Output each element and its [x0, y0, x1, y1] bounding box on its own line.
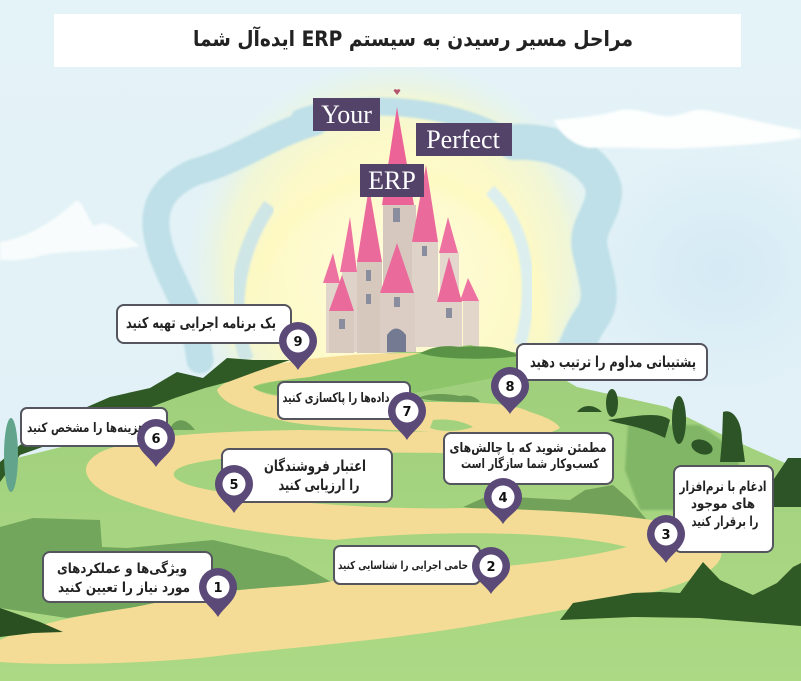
title card: [54, 14, 741, 67]
castle: front towers: [329, 165, 462, 353]
label: Perfect: Perfect: [426, 125, 501, 154]
pin 9: 9: [293, 335, 303, 350]
pin 1: [199, 568, 237, 617]
hill: shaded right slope: [625, 425, 750, 520]
pin 3: [647, 515, 685, 563]
callout 5: اعتبار فروشندگان: [264, 457, 366, 475]
pin 7: [388, 392, 426, 440]
callout 1: ویژگی‌ها و عملکردهای: [57, 560, 187, 577]
pin 5: [215, 465, 253, 513]
callout 3: ادغام با نرم‌افزار: [679, 479, 766, 495]
label: Your: Your: [321, 100, 372, 129]
pin 4: 4: [498, 491, 508, 506]
pin 4: [484, 478, 522, 524]
callout 9: یک برنامه اجرایی تهیه کنید: [126, 314, 276, 332]
bush: small near steps 6 and 7: [170, 394, 480, 430]
callout 7: [278, 382, 410, 419]
label: Your: [313, 98, 380, 131]
callout 4: کسب‌وکار شما سازگار است: [461, 456, 599, 472]
pin 2: 2: [486, 560, 496, 575]
pin 3: 3: [661, 528, 671, 543]
road: winding path: [0, 353, 721, 664]
callout 8: پشتیبانی مداوم را ترتیب دهید: [530, 353, 696, 372]
bush: castle base: [420, 346, 520, 359]
callout 4: مطمئن شوید که با چالش‌های: [450, 441, 606, 456]
pin 7: 7: [402, 405, 412, 420]
pin 1: 1: [213, 581, 223, 596]
callout 8: [517, 344, 707, 380]
label: ERP: ERP: [368, 166, 416, 195]
callout 5: [222, 449, 392, 502]
pin 8: [491, 367, 529, 414]
trees: dark right: [577, 389, 801, 507]
bushes: dark ridge left: [0, 358, 290, 482]
castle: [323, 89, 479, 353]
callout 2: حامی اجرایی را شناسایی کنید: [338, 559, 468, 572]
bushes: centre textured: [463, 485, 647, 520]
castle: heart finial: [394, 89, 400, 95]
callout 6: هزینه‌ها را مشخص کنید: [27, 421, 145, 436]
callout 5: را ارزیابی کنید: [278, 476, 360, 494]
inner grass island: [430, 419, 473, 431]
cloud: top right: [554, 110, 801, 149]
label: Perfect: [416, 123, 512, 156]
pin 2: [472, 547, 510, 594]
pin 6: [137, 419, 175, 467]
hill: upper grass band: [253, 345, 525, 400]
callout 3: های موجود: [691, 496, 755, 512]
pin 8: 8: [505, 380, 515, 395]
swirl: pale blue ribbon: [156, 107, 604, 360]
title text: مراحل مسیر رسیدن به سیستم ERP ایده‌آل شما: [193, 26, 633, 51]
callout 1: [43, 552, 212, 602]
bushes: left textured: [0, 518, 333, 618]
castle: back towers: [323, 107, 479, 353]
callout 4: [444, 433, 613, 484]
callout 9: [117, 305, 291, 343]
hill ground: [0, 352, 801, 681]
pin 9: [279, 322, 317, 370]
bush: dark lower left: [0, 608, 63, 637]
callout 3: [674, 466, 773, 552]
bush: dark lower right: [560, 562, 801, 626]
callout 3: را برقرار کنید: [692, 514, 758, 530]
pin 6: 6: [151, 432, 161, 447]
callout 1: مورد نیاز را تعیین کنید: [58, 580, 190, 596]
tree: cypress left: [4, 418, 18, 492]
cloud: left: [0, 200, 140, 260]
callout 2: [334, 546, 480, 584]
label: ERP: [360, 164, 424, 197]
callout 6: [21, 408, 167, 446]
callout 7: داده‌ها را پاکسازی کنید: [282, 391, 390, 406]
pin 5: 5: [229, 478, 239, 493]
